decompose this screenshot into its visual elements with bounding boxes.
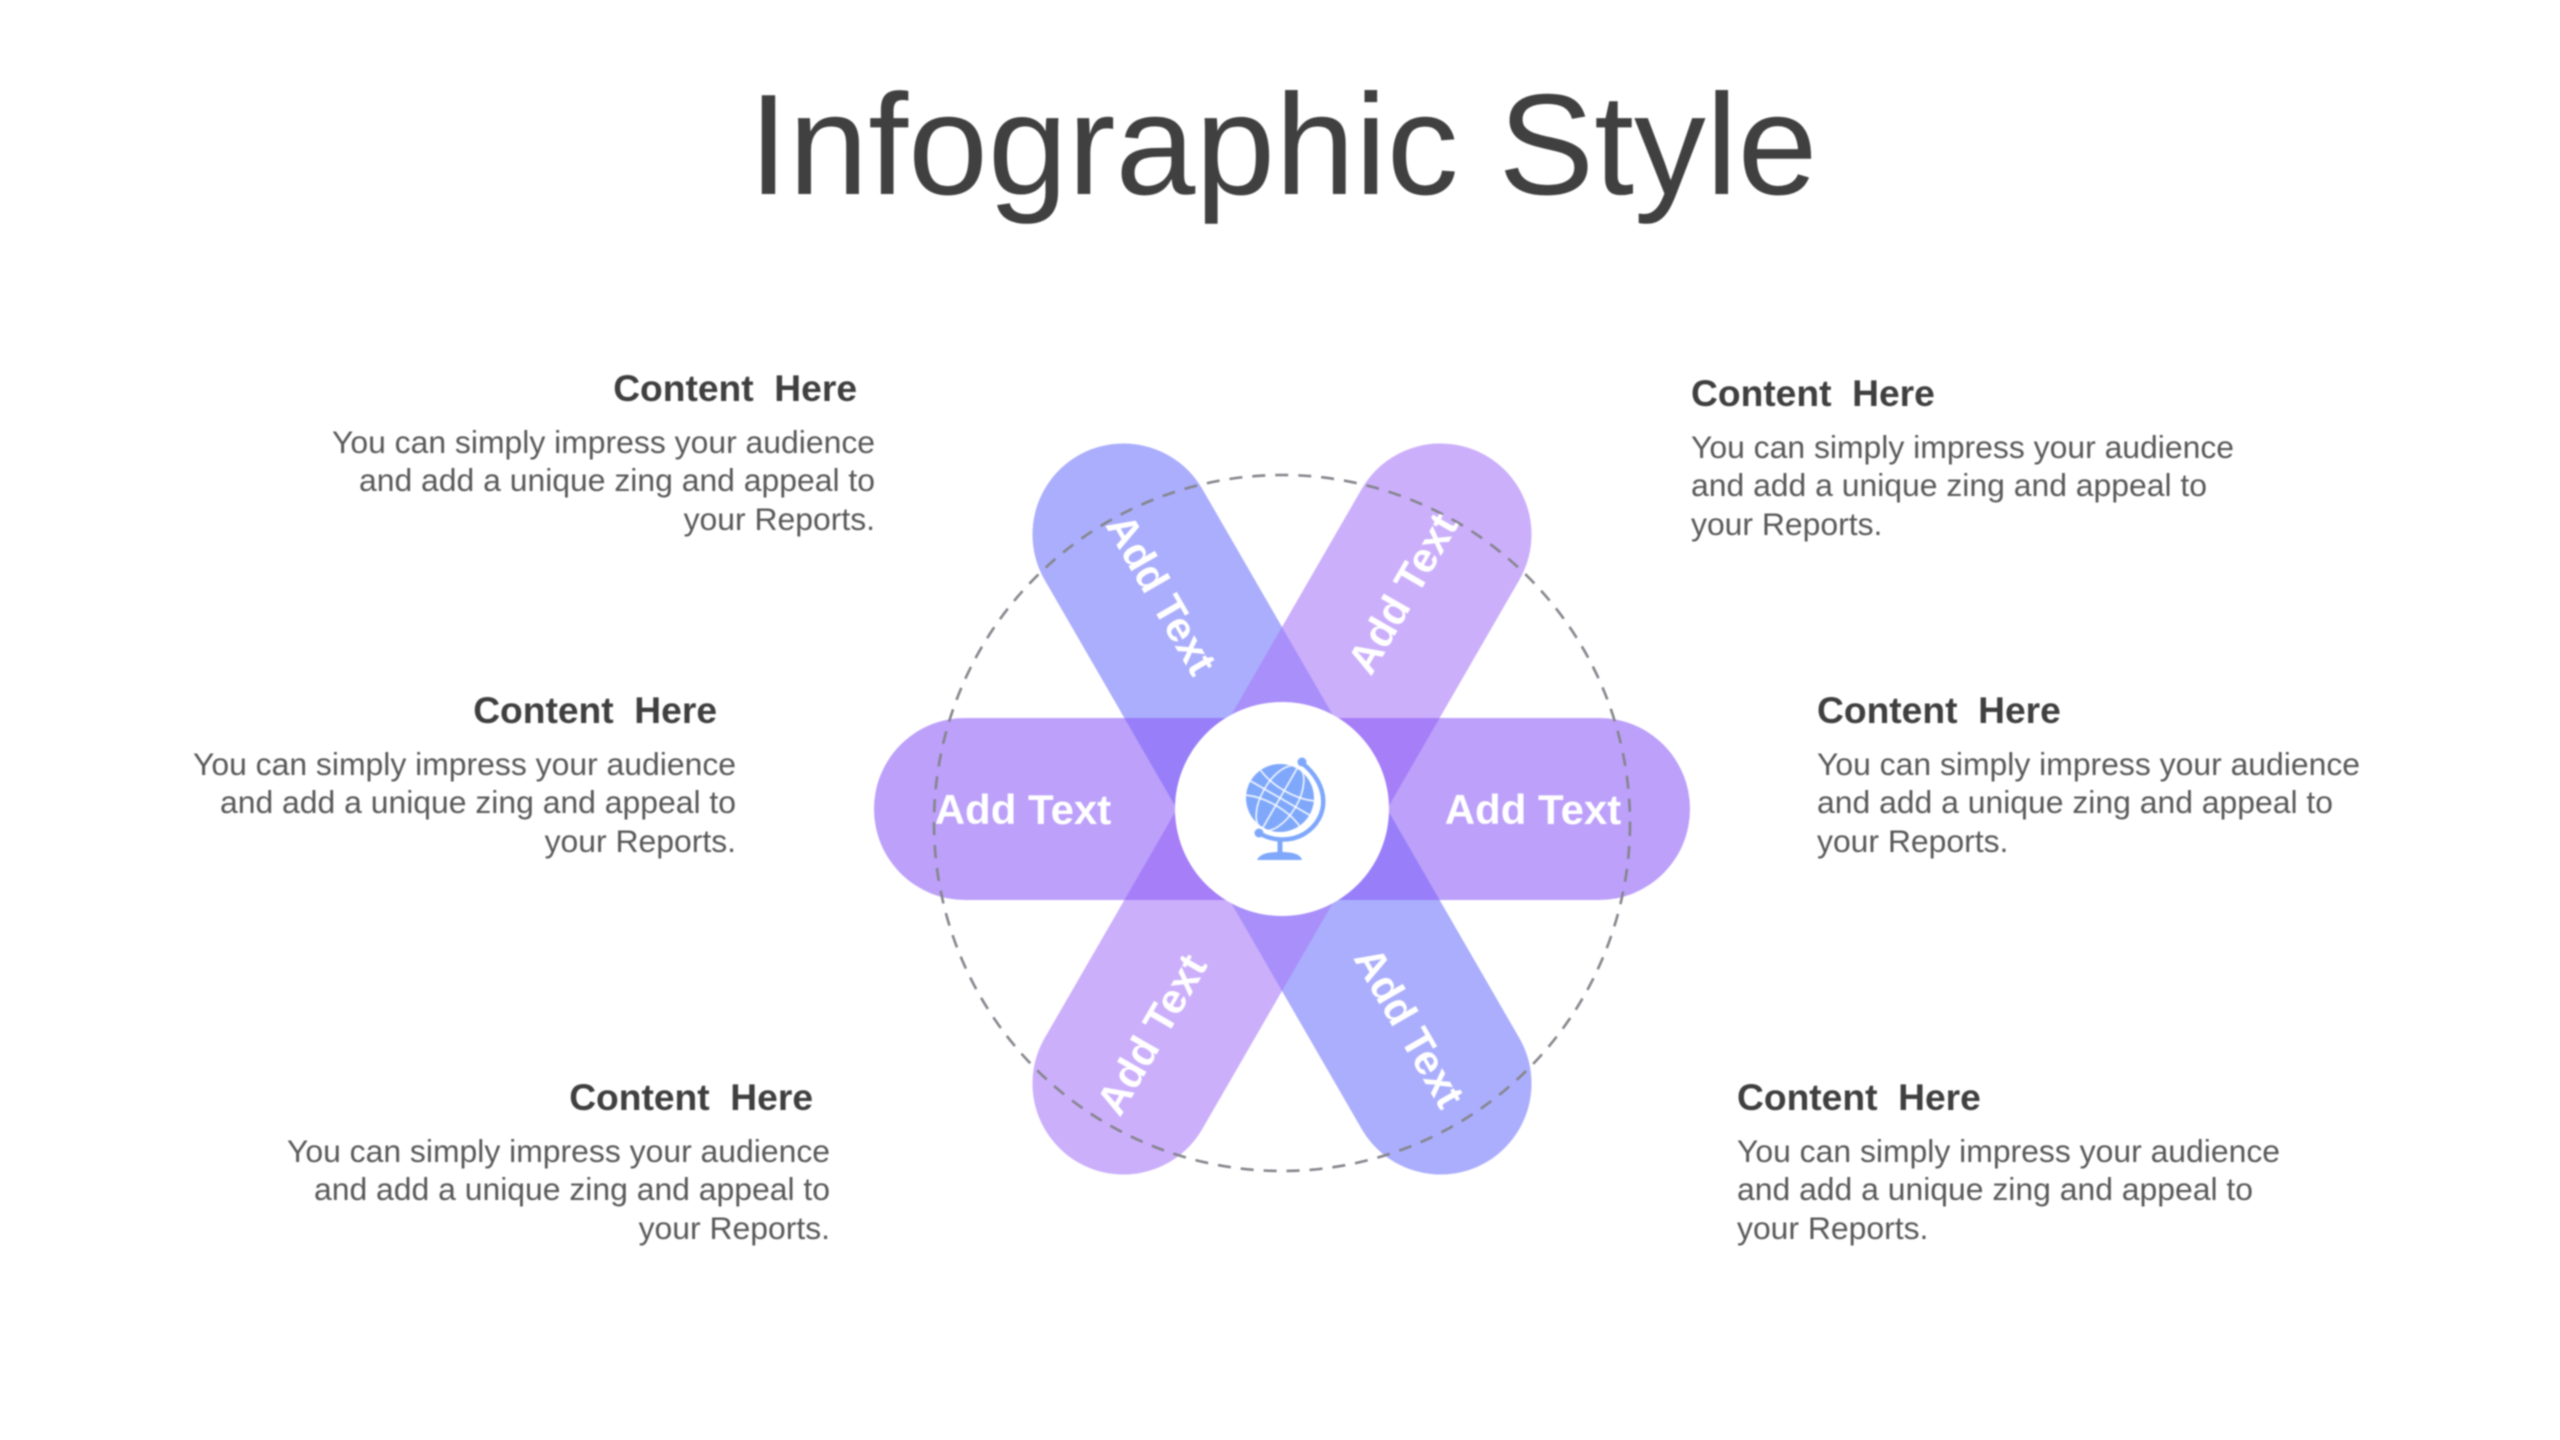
text block: top left: and add a unique zing and appeal to — [359, 462, 875, 498]
text block: top right — [1691, 372, 2234, 542]
label: right petal: Add Text — [1445, 786, 1621, 833]
text block: bottom right: and add a unique zing and appeal to — [1737, 1171, 2253, 1207]
text block: bottom right: Content Here — [1737, 1076, 1981, 1118]
text block: top right: your Reports. — [1691, 506, 1882, 542]
text block: top right: You can simply impress your audience — [1691, 429, 2234, 465]
text block: top left: Content Here — [613, 367, 857, 409]
text block: middle right: Content Here — [1817, 689, 2061, 731]
label: top-left petal: Add Text — [1097, 506, 1226, 682]
title: Infographic Style — [749, 65, 1817, 225]
text block: middle right: and add a unique zing and appeal to — [1817, 784, 2333, 820]
label: top-right petal: Add Text — [1338, 505, 1467, 681]
text block: top right: and add a unique zing and appeal to — [1691, 467, 2207, 503]
text block: middle left: You can simply impress your audience — [193, 746, 736, 782]
petal: horizontal purple — [874, 718, 1690, 900]
text block: middle right: You can simply impress your audience — [1817, 746, 2360, 782]
label: left petal: Add Text — [935, 786, 1111, 833]
text block: middle left: your Reports. — [545, 823, 736, 859]
text block: top left: your Reports. — [684, 501, 875, 537]
dashed orbit circle — [934, 475, 1630, 1171]
text block: bottom left — [287, 1076, 830, 1246]
text block: middle left: Content Here — [473, 689, 717, 731]
text block: middle right: your Reports. — [1817, 823, 2008, 859]
text block: top left: You can simply impress your audience — [332, 424, 875, 460]
text block: bottom left: your Reports. — [639, 1210, 830, 1246]
text block: bottom left: and add a unique zing and appeal to — [314, 1171, 830, 1207]
text block: bottom left: You can simply impress your audience — [287, 1133, 830, 1169]
label: bottom-left petal: Add Text — [1087, 946, 1216, 1122]
petal: top-right to bottom-left light purple — [999, 410, 1565, 1208]
text block: bottom right — [1737, 1076, 2280, 1246]
petal: top-left to bottom-right blue — [999, 410, 1565, 1208]
icon: globe — [1245, 756, 1326, 861]
text block: top right: Content Here — [1691, 372, 1935, 414]
text block: middle left — [193, 689, 736, 859]
text block: bottom left: Content Here — [569, 1076, 813, 1118]
center white circle — [1175, 702, 1389, 916]
radial diagram — [874, 410, 1690, 1208]
text block: middle right — [1817, 689, 2360, 859]
text block: top left — [332, 367, 875, 537]
text block: bottom right: your Reports. — [1737, 1210, 1928, 1246]
text block: middle left: and add a unique zing and appeal to — [220, 784, 736, 820]
text block: bottom right: You can simply impress your audience — [1737, 1133, 2280, 1169]
label: bottom-right petal: Add Text — [1345, 939, 1474, 1115]
